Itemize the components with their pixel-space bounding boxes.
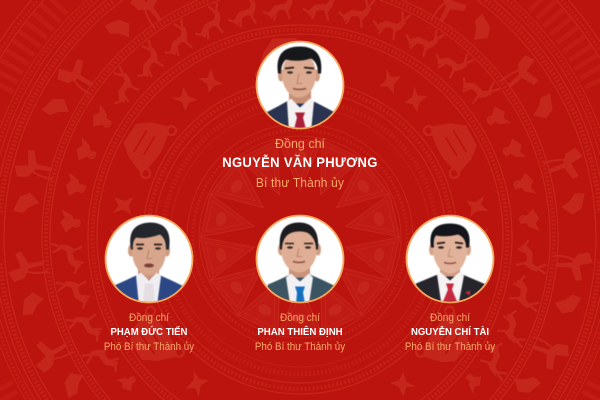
- portrait: Phạm Đức Tiến: [104, 214, 194, 304]
- role: Bí thư Thành ủy: Bí thư Thành ủy: [256, 176, 344, 190]
- name: Phan Thiên Định: PHAN THIÊN ĐỊNH: [257, 326, 343, 338]
- name: Nguyễn Chí Tài: NGUYỄN CHÍ TÀI: [411, 326, 489, 338]
- portrait: Phan Thiên Định: [256, 214, 344, 304]
- role: Phó Bí thư Thành ủy: Phó Bí thư Thành ủy: [405, 341, 495, 353]
- inner band: boats and dancers: [110, 35, 490, 398]
- label: Đồng chí: Đồng chí: [275, 137, 325, 151]
- portrait: Nguyễn Văn Phương: [256, 40, 344, 130]
- panel: Nguyễn Văn Phương: [222, 40, 378, 190]
- panel: Phan Thiên Định: [255, 214, 346, 353]
- role: Phó Bí thư Thành ủy: Phó Bí thư Thành ủy: [104, 341, 194, 353]
- star triangles: [201, 140, 399, 334]
- inner concentric bands: [143, 80, 457, 394]
- panel: Phạm Đức Tiến: [104, 214, 194, 353]
- label: Đồng chí: Đồng chí: [129, 312, 169, 324]
- name: Nguyễn Văn Phương: NGUYỄN VĂN PHƯƠNG: [222, 154, 378, 170]
- label: Đồng chí: Đồng chí: [280, 312, 320, 324]
- label: Đồng chí: Đồng chí: [430, 312, 470, 324]
- portrait: Nguyễn Chí Tài: [406, 214, 494, 304]
- name: Phạm Đức Tiến: PHẠM ĐỨC TIẾN: [111, 326, 187, 338]
- role: Phó Bí thư Thành ủy: Phó Bí thư Thành ủy: [255, 341, 345, 353]
- panel: Nguyễn Chí Tài: [405, 214, 496, 353]
